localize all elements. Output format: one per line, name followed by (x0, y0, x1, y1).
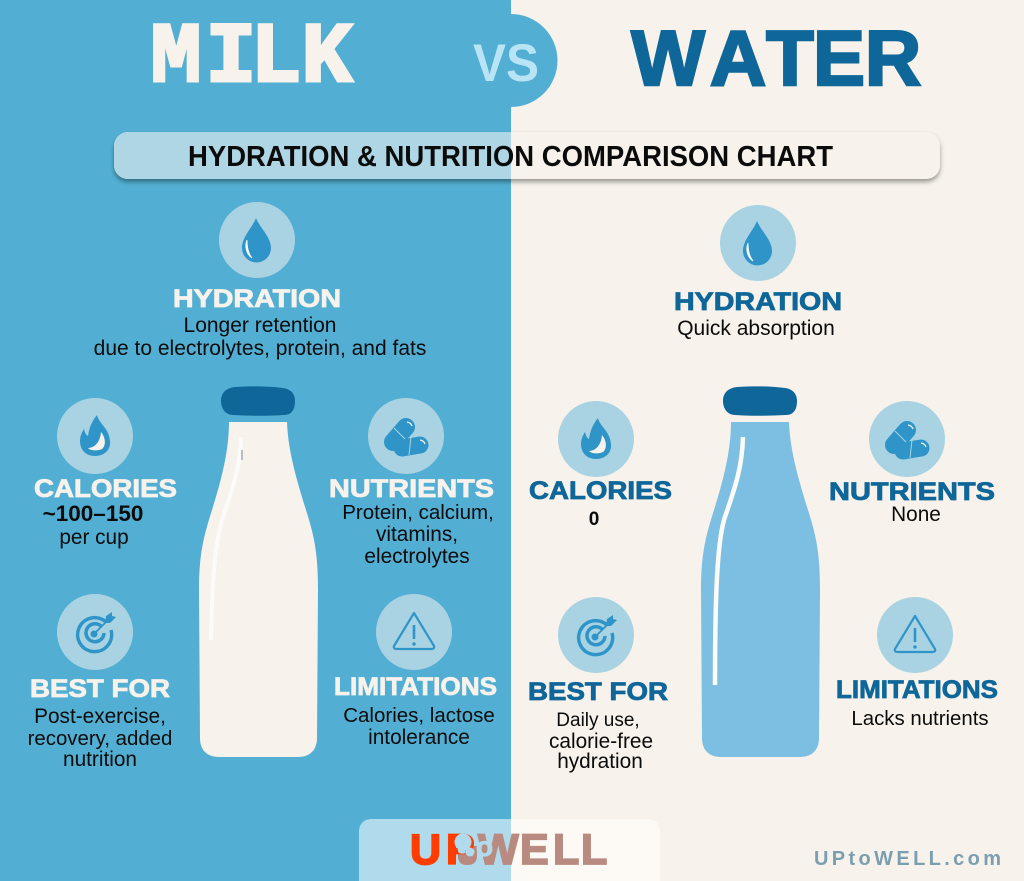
milk best for block: recovery, added (28, 728, 172, 750)
water calories block: CALORIES (529, 477, 672, 505)
milk best for block: nutrition (63, 748, 137, 771)
milk hydration block: Longer retention (184, 314, 336, 337)
milk limitations block: intolerance (368, 726, 470, 749)
milk calories block: CALORIES (34, 475, 177, 503)
chart subtitle banner (114, 132, 940, 179)
water calories block: 0 (589, 509, 599, 530)
water nutrients block: NUTRIENTS (829, 478, 995, 506)
milk hydration block (94, 202, 426, 360)
milk nutrients block: vitamins, (376, 523, 458, 546)
water nutrients block: None (891, 503, 941, 526)
title: MILK: MILK (150, 10, 353, 107)
logo plate and wordmark: UP (410, 826, 475, 874)
water limitations block: Lacks nutrients (851, 708, 989, 730)
water nutrients block (829, 401, 995, 526)
water hydration block (674, 205, 842, 340)
water best for block: Daily use, (556, 710, 640, 731)
milk bottle (199, 386, 318, 757)
logo plate and wordmark: WELL (478, 826, 607, 874)
panel: milk (28, 202, 497, 771)
milk limitations block: Calories, lactose (343, 704, 495, 727)
water hydration block: Quick absorption (677, 317, 835, 340)
background: water half (511, 0, 1024, 881)
milk calories block: ~100–150 (43, 501, 143, 526)
milk nutrients block: electrolytes (364, 545, 470, 568)
water best for block: hydration (557, 750, 643, 773)
water best for block: BEST FOR (528, 678, 668, 706)
VS badge (473, 14, 558, 107)
chart subtitle banner: HYDRATION & NUTRITION COMPARISON CHART (188, 141, 834, 173)
website label: UPtoWELL.com (814, 848, 1001, 870)
logo plate and wordmark (359, 819, 660, 881)
water best for block (528, 597, 668, 773)
milk calories block: per cup (59, 526, 129, 549)
milk best for block (28, 594, 172, 771)
milk hydration block: due to electrolytes, protein, and fats (94, 337, 426, 360)
milk calories block (34, 398, 177, 549)
water hydration block: HYDRATION (674, 288, 842, 316)
water best for block: calorie-free (549, 730, 653, 753)
VS badge: VS (473, 34, 539, 93)
milk best for block: Post-exercise, (34, 705, 166, 728)
milk limitations block: LIMITATIONS (334, 673, 497, 701)
milk nutrients block: NUTRIENTS (329, 475, 494, 503)
water bottle (701, 386, 820, 757)
title: WATER: WATER (631, 14, 921, 102)
milk nutrients block (329, 398, 494, 568)
water limitations block: LIMITATIONS (836, 676, 998, 704)
water limitations block (836, 597, 998, 730)
logo plate and wordmark: to (456, 828, 493, 862)
background: milk half (0, 0, 511, 881)
milk best for block: BEST FOR (30, 675, 170, 703)
milk limitations block (334, 594, 497, 749)
panel: water (528, 205, 998, 773)
milk nutrients block: Protein, calcium, (342, 501, 494, 524)
milk hydration block: HYDRATION (173, 285, 341, 313)
water calories block (529, 401, 672, 530)
